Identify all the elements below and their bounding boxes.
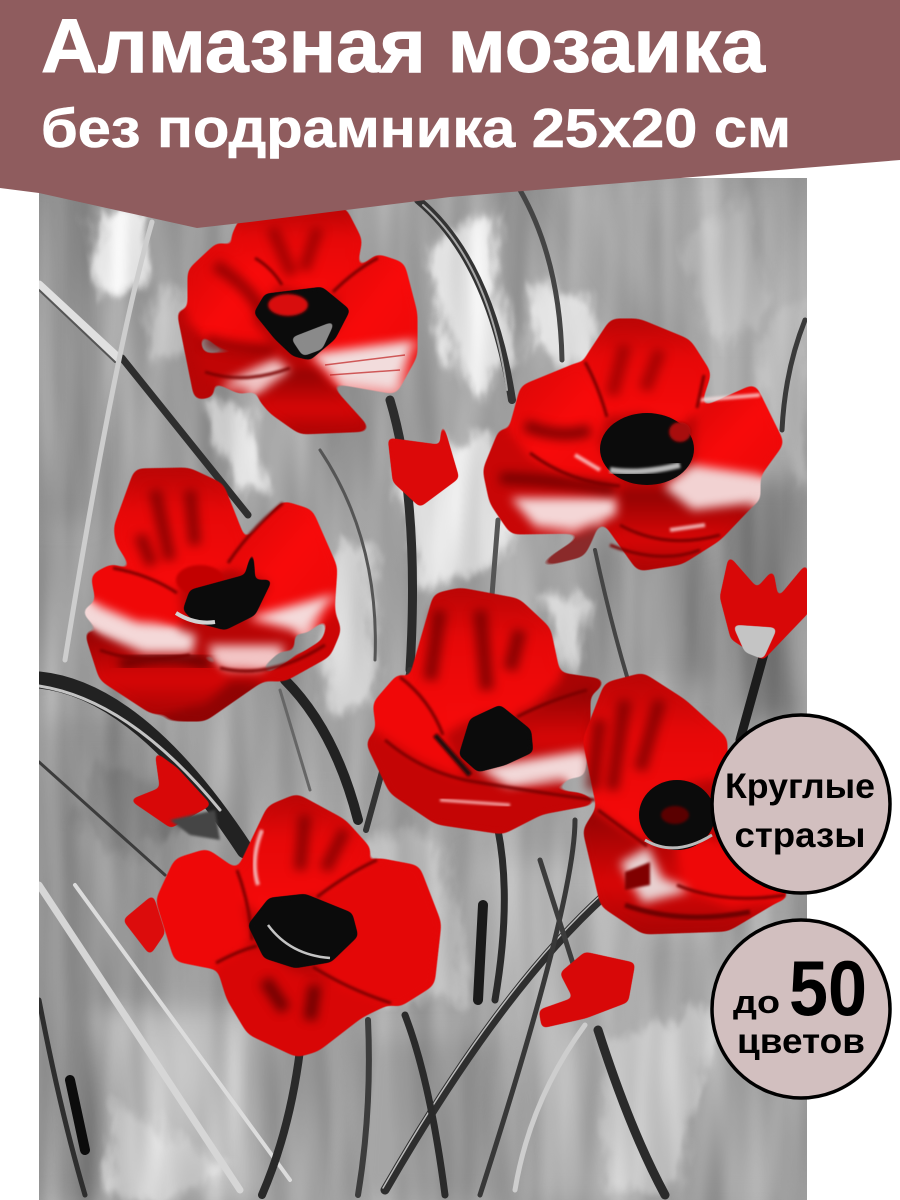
poppy 3: left <box>81 468 341 721</box>
small poppy buds <box>130 420 809 1028</box>
painting: poppies on grey canvas <box>39 178 809 1200</box>
badge: up to 50 colours: 50 <box>789 944 867 1032</box>
poppy 5: right lower <box>583 673 789 934</box>
badge: up to 50 colours <box>712 920 890 1098</box>
title: Алмазная мозаика <box>41 4 766 89</box>
poppy 2: upper right <box>483 319 784 571</box>
header banner <box>0 0 900 228</box>
badge: up to 50 colours: до <box>733 984 780 1020</box>
flower stems <box>39 190 805 1195</box>
badge: round rhinestones: стразы <box>734 816 866 855</box>
badge: up to 50 colours: цветов <box>737 1022 865 1061</box>
poppy 1: top <box>176 207 417 434</box>
subtitle: без подрамника 25х20 см <box>41 97 791 159</box>
badge: round rhinestones <box>712 715 890 893</box>
badge: round rhinestones: Круглые <box>725 767 875 806</box>
poppy 4: centre <box>366 588 607 834</box>
canvas brush texture <box>39 178 807 1200</box>
poppy 6: bottom <box>123 794 441 1057</box>
